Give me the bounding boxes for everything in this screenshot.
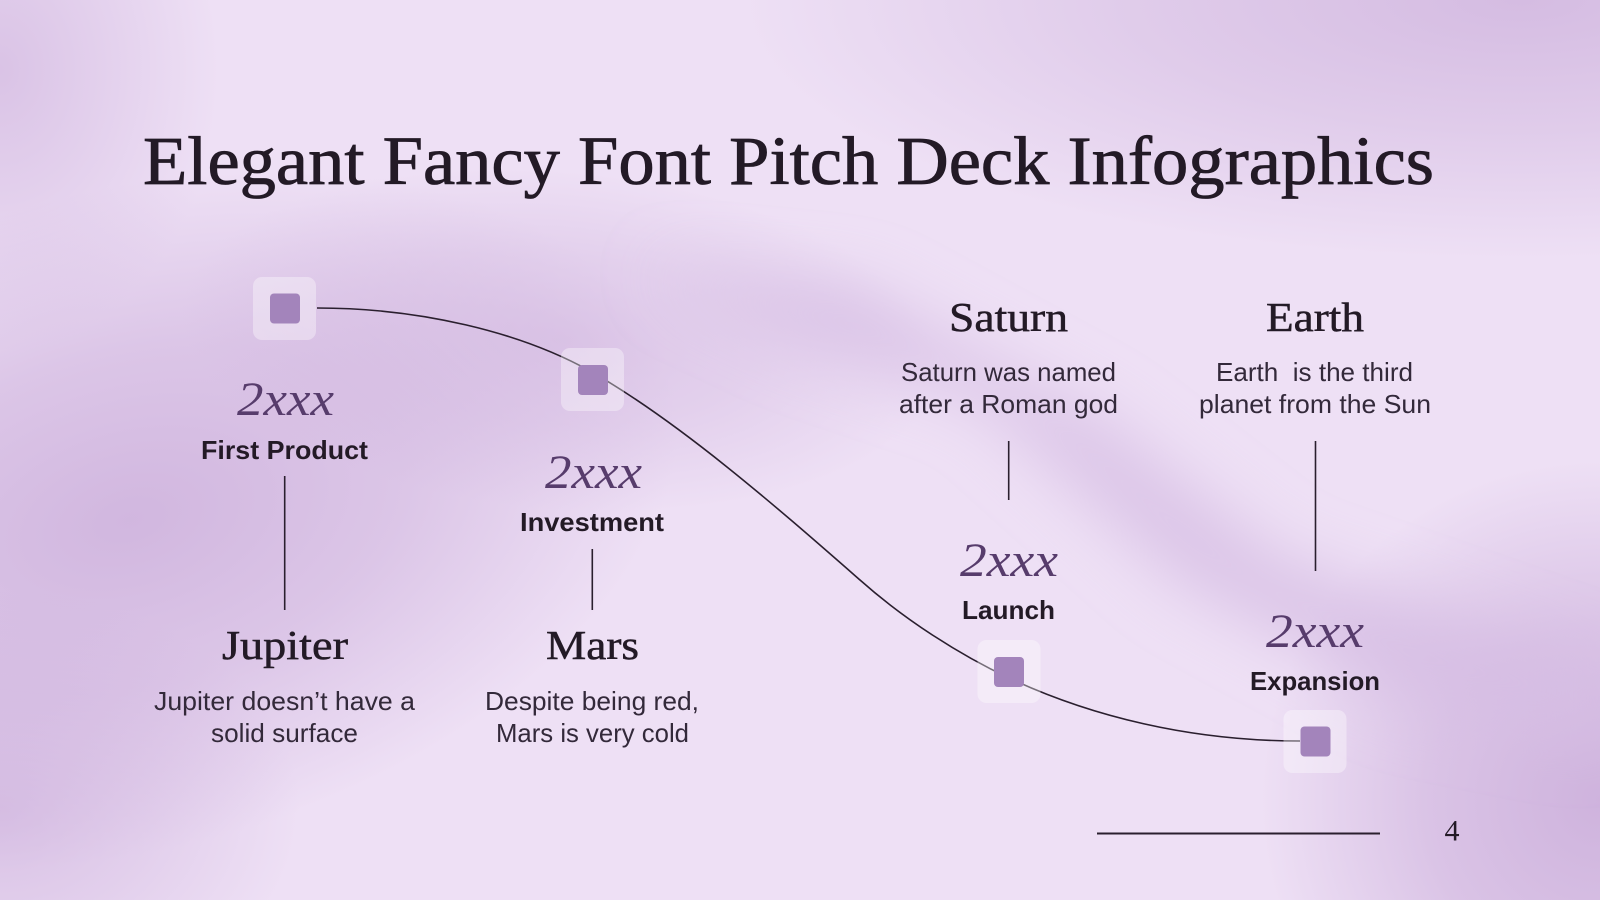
column: Saturn: Launch xyxy=(962,595,1055,625)
timeline curve xyxy=(317,308,1300,741)
column: Saturn: 2xxx xyxy=(960,534,1058,587)
column: Jupiter: Jupiter xyxy=(222,622,348,668)
column: Jupiter: solid surface xyxy=(211,718,358,748)
column: Earth xyxy=(1199,294,1431,696)
footer rule and page number: 4 xyxy=(1444,814,1460,848)
column: Saturn: Saturn was named xyxy=(901,357,1116,387)
column: Mars: Investment xyxy=(520,507,664,537)
column: Saturn: after a Roman god xyxy=(899,389,1118,419)
node: Launch xyxy=(978,640,1040,703)
column: Earth: Expansion xyxy=(1250,666,1380,696)
column: Mars: Despite being red, xyxy=(485,686,699,716)
title: Elegant Fancy Font Pitch Deck Infographics xyxy=(143,123,1434,199)
column: Mars: Mars is very cold xyxy=(496,718,689,748)
node: Investment xyxy=(561,348,624,411)
column: Earth: 2xxx xyxy=(1266,605,1364,658)
column: Jupiter xyxy=(154,373,416,748)
column: Jupiter: First Product xyxy=(201,435,368,465)
column: Jupiter: 2xxx xyxy=(237,373,334,426)
column: Jupiter: Jupiter doesn’t have a xyxy=(154,686,416,716)
column: Saturn xyxy=(899,294,1118,625)
column: Saturn: Saturn xyxy=(949,294,1068,340)
node: Expansion xyxy=(1284,710,1346,773)
column: Earth: Earth is the third xyxy=(1216,357,1413,387)
column: Earth: Earth xyxy=(1266,294,1364,340)
column: Earth: planet from the Sun xyxy=(1199,389,1431,419)
column: Mars xyxy=(485,446,699,748)
node: First Product xyxy=(253,277,316,340)
column: Mars: 2xxx xyxy=(545,446,642,499)
column: Mars: Mars xyxy=(546,622,639,668)
